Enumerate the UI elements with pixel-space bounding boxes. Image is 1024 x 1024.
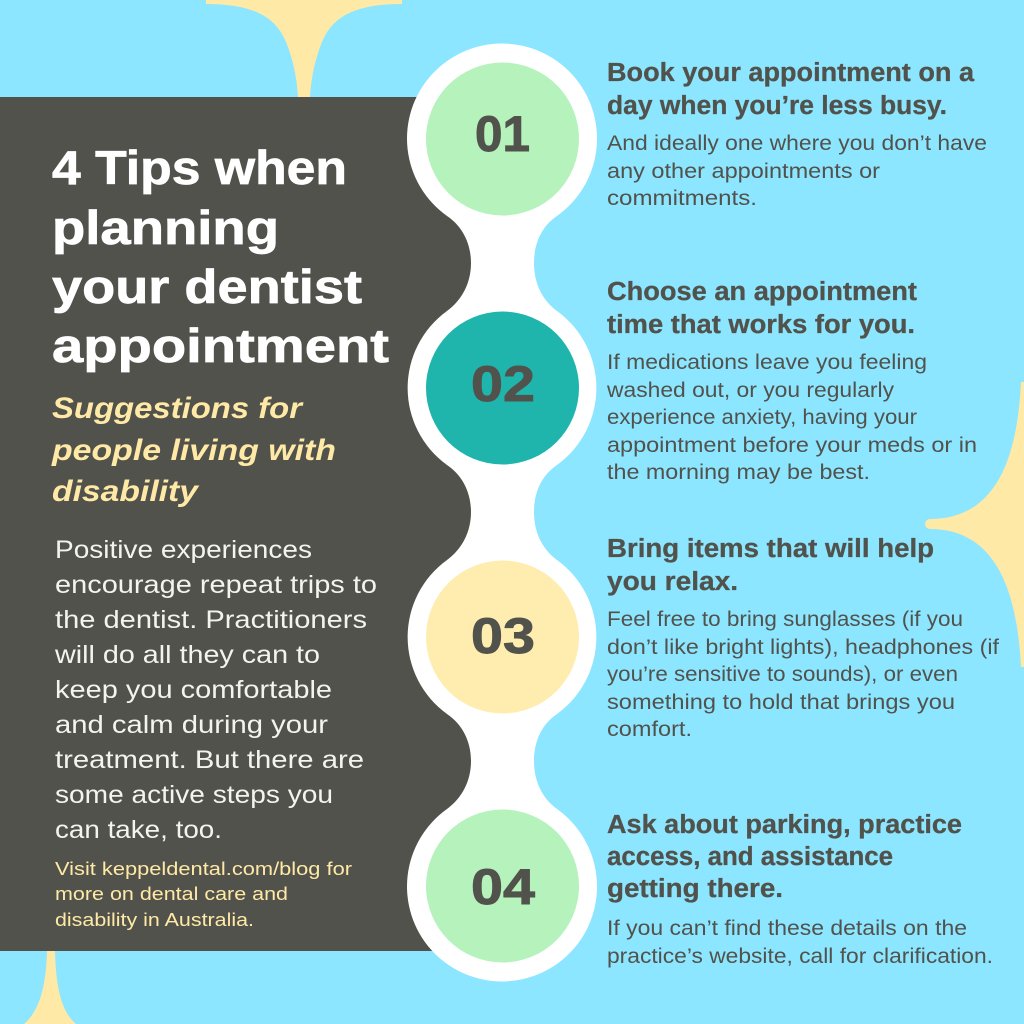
intro text block: will do all they can to (54, 641, 320, 669)
tip 3 text: you’re sensitive to sounds), or even (607, 663, 958, 686)
tip 2 text: washed out, or you regularly (606, 379, 895, 402)
tip 2 text: time that works for you. (607, 311, 915, 339)
title: appointment (52, 319, 389, 372)
footer note: more on dental care and (55, 883, 288, 904)
tip 3 text: Bring items that will help (607, 535, 934, 563)
footer note: Visit keppeldental.com/blog for (55, 858, 352, 879)
number badge 04: 04 (471, 859, 535, 915)
intro text block: and calm during your (55, 711, 328, 739)
tip 3 text: you relax. (607, 568, 738, 596)
decorative star: top (206, 0, 402, 97)
footer note (55, 858, 352, 930)
tip 3 text: Feel free to bring sunglasses (if you (607, 608, 963, 631)
number badge 02 (426, 312, 579, 464)
tip 4 text: practice’s website, call for clarification. (607, 945, 993, 968)
number badge 04 (426, 810, 579, 962)
tip 3 text (607, 535, 999, 741)
white timeline connector (407, 44, 597, 981)
number badge 03: 03 (471, 608, 535, 664)
tip 2 text: the morning may be best. (607, 461, 870, 484)
tip 1 text: commitments. (607, 187, 757, 210)
number badge 01 (426, 62, 579, 216)
title: planning (52, 201, 279, 254)
tip 4 text: If you can’t find these details on the (607, 917, 967, 940)
tip 3 text: comfort. (607, 718, 692, 741)
footer note: disability in Australia. (55, 909, 254, 930)
intro text block: keep you comfortable (55, 676, 332, 704)
tip 1 text (607, 59, 987, 210)
intro text block: treatment. But there are (55, 746, 364, 774)
title (52, 141, 389, 372)
tip 4 text: getting there. (607, 875, 783, 903)
tip 3 text: don’t like bright lights), headphones (if (607, 636, 999, 659)
number badge 01: 01 (475, 106, 530, 162)
intro text block: the dentist. Practitioners (55, 606, 367, 634)
intro text block (54, 536, 377, 844)
title: your dentist (52, 260, 362, 313)
intro text block: Positive experiences (55, 536, 312, 564)
tip 4 text: Ask about parking, practice (607, 811, 962, 839)
number badge 03 (426, 560, 579, 714)
tip 2 text: Choose an appointment (607, 278, 918, 306)
panel: dark introduction background (0, 97, 500, 951)
intro text block: encourage repeat trips to (55, 571, 377, 599)
intro text block: can take, too. (55, 816, 222, 844)
decorative star: right (925, 382, 1024, 667)
tip 2 text: experience anxiety, having your (607, 406, 917, 429)
intro text block: some active steps you (55, 781, 333, 809)
tip 2 text: appointment before your meds or in (607, 434, 977, 457)
tip 1 text: Book your appointment on a (607, 59, 975, 87)
tip 1 text: And ideally one where you don’t have (607, 132, 987, 155)
subtitle: people living with (51, 434, 336, 467)
tip 1 text: day when you’re less busy. (607, 92, 947, 120)
title: 4 Tips when (52, 141, 347, 194)
tip 2 text (606, 278, 977, 484)
subtitle: disability (52, 475, 199, 508)
number badge 02: 02 (471, 356, 535, 412)
subtitle (51, 392, 336, 508)
tip 4 text: access, and assistance (607, 843, 893, 871)
tip 1 text: any other appointments or (607, 160, 880, 183)
tip 3 text: something to hold that brings you (607, 691, 955, 714)
subtitle: Suggestions for (52, 392, 305, 425)
tip 4 text (607, 811, 993, 968)
tip 2 text: If medications leave you feeling (607, 351, 927, 374)
decorative star: bottom left (24, 951, 76, 1024)
